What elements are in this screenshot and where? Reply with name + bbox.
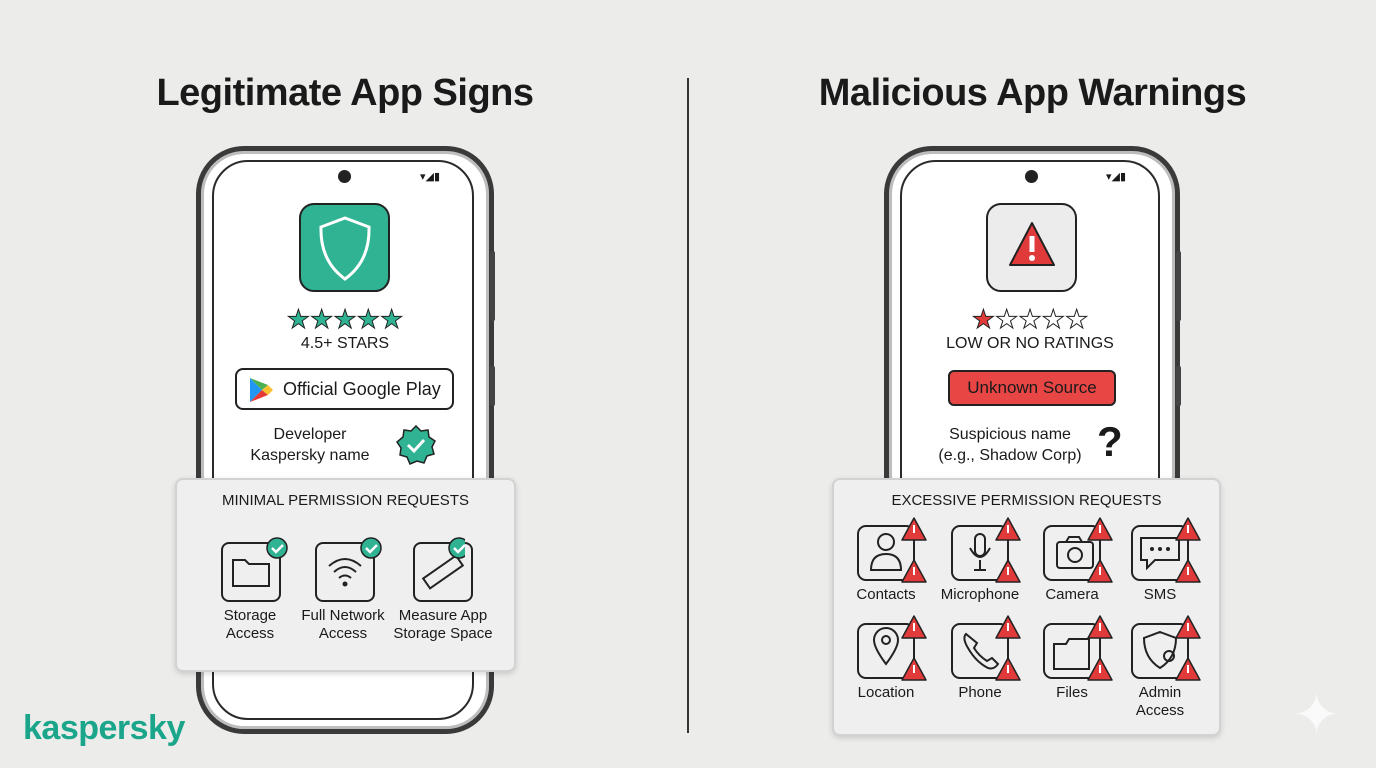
text: developer — [250, 426, 370, 464]
panel: minimal permissions: Full Network — [301, 607, 385, 624]
badge: google play — [235, 368, 454, 410]
icon: sparkle: ✦ — [1293, 683, 1340, 746]
panel: excessive permissions: Location — [858, 684, 914, 701]
panel: minimal permissions: Storage — [224, 607, 276, 624]
icon: ruler — [413, 542, 473, 602]
panel: excessive permissions: Phone — [958, 684, 1002, 701]
title: malicious: Malicious App Warnings — [819, 72, 1246, 114]
panel: excessive permissions: SMS — [1144, 586, 1176, 603]
badge: google play: Official Google Play — [283, 379, 441, 399]
text: low ratings: LOW OR NO RATINGS — [946, 335, 1114, 352]
phone: right — [884, 146, 1181, 478]
rating stars left: ★★★★★ — [287, 304, 403, 334]
panel: excessive permissions: Camera — [1045, 586, 1099, 603]
phone: right: ▾◢▮ — [1106, 171, 1126, 183]
panel: minimal permissions — [175, 478, 516, 672]
badge: unknown source — [948, 370, 1116, 406]
phone: left: ▾◢▮ — [420, 171, 440, 183]
text: suspicious name: Suspicious name — [949, 426, 1071, 443]
panel: excessive permissions: Contacts — [856, 586, 916, 603]
divider — [687, 78, 689, 733]
text: suspicious name — [938, 426, 1082, 464]
panel: excessive permissions: Admin — [1139, 684, 1181, 701]
icon: question: ? — [1097, 418, 1123, 465]
check marks — [266, 537, 465, 559]
panel: minimal permissions: Measure App — [399, 607, 487, 624]
panel: excessive permissions — [832, 478, 1221, 736]
logo: kaspersky: kaspersky — [23, 709, 185, 747]
icon: wifi — [315, 542, 375, 602]
panel: excessive permissions: Files — [1056, 684, 1088, 701]
phone: left — [196, 146, 495, 734]
panel: minimal permissions: Access — [226, 625, 274, 642]
icon: storage — [221, 542, 281, 602]
text: 4.5+ stars: 4.5+ STARS — [301, 335, 389, 352]
panel: excessive permissions: Access — [1136, 702, 1184, 719]
app icon: warning — [986, 203, 1077, 292]
rating stars right: ★★★★★ — [972, 304, 1088, 334]
text: developer: Kaspersky name — [250, 447, 370, 464]
panel: minimal permissions: MINIMAL PERMISSION REQUESTS — [222, 492, 469, 509]
panel: minimal permissions: Storage Space — [393, 625, 493, 642]
panel: minimal permissions: Access — [319, 625, 367, 642]
text: developer: Developer — [274, 426, 346, 443]
badge: unknown source: Unknown Source — [967, 378, 1097, 397]
panel: excessive permissions: Microphone — [941, 586, 1019, 603]
text: suspicious name: (e.g., Shadow Corp) — [938, 447, 1082, 464]
icon: verified badge — [396, 425, 436, 465]
panel: excessive permissions: EXCESSIVE PERMISSION REQUESTS — [891, 492, 1162, 509]
app icon: shield — [299, 203, 390, 292]
title: legitimate: Legitimate App Signs — [156, 72, 534, 114]
